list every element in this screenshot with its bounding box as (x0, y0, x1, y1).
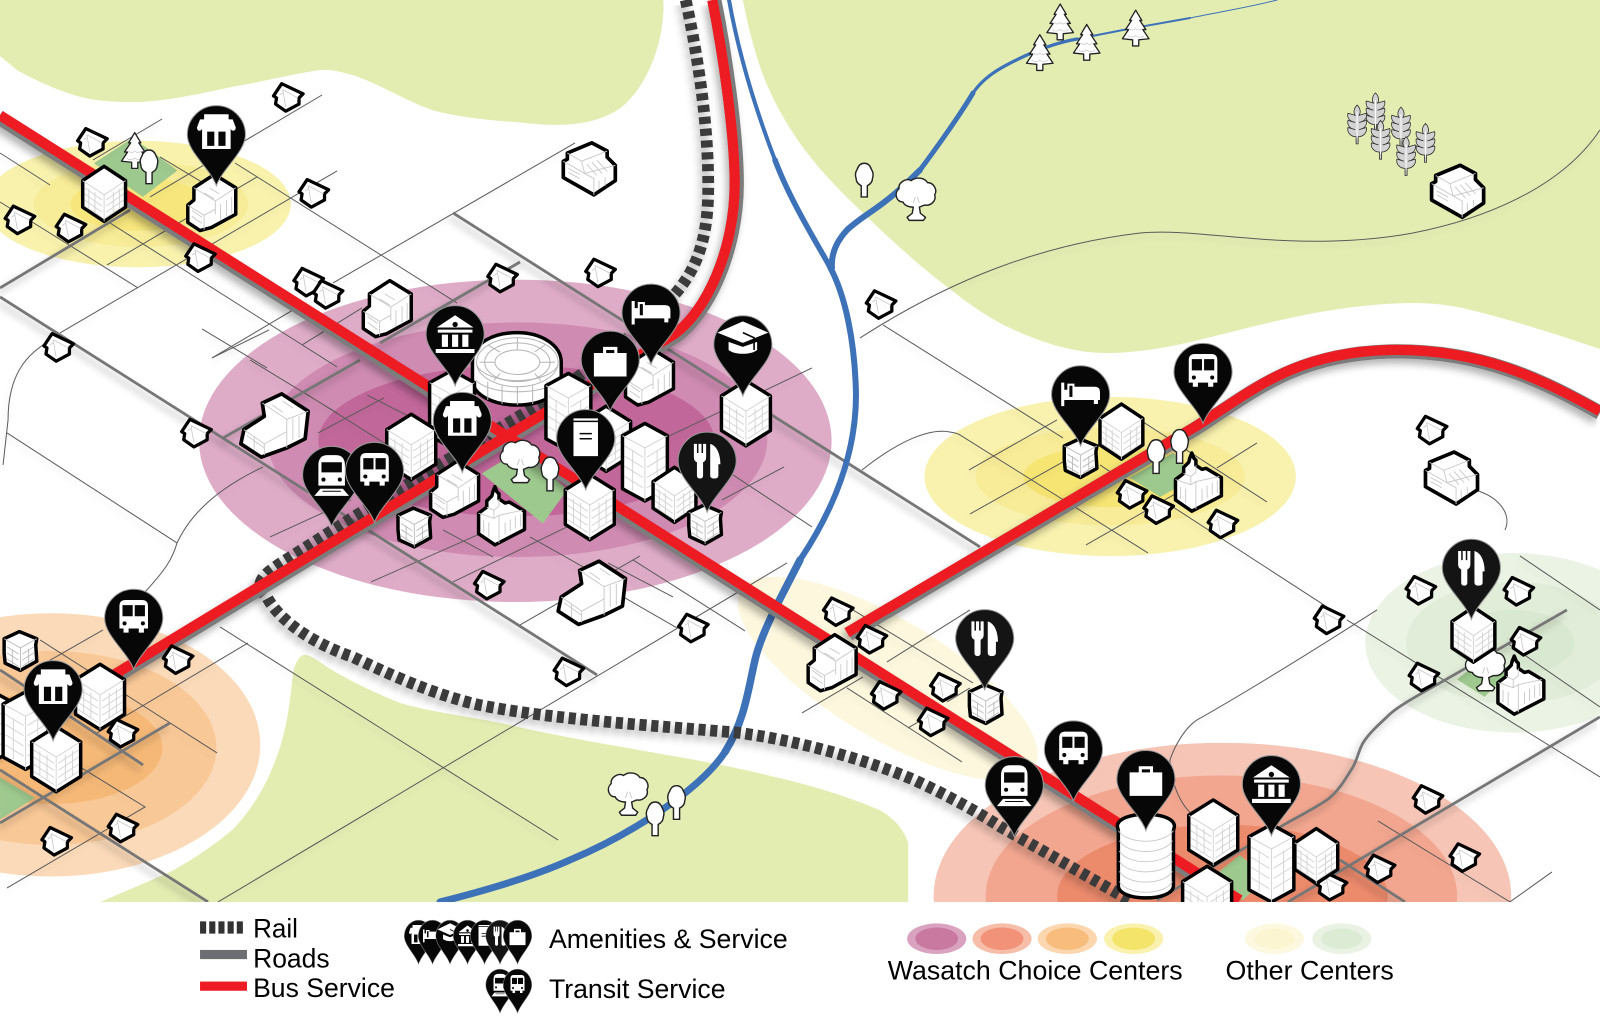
pin: employment (581, 331, 639, 411)
pin: restaurant middle (956, 610, 1014, 690)
thin local roads (0, 95, 1600, 902)
legend: transit pins (486, 969, 532, 1013)
pin: train center (303, 446, 361, 526)
center: yellow top left (0, 141, 291, 267)
stadium (472, 333, 561, 405)
pin: education (714, 316, 772, 396)
legend: other swatches (1245, 923, 1371, 954)
river (440, 0, 1277, 902)
collector roads (0, 210, 1600, 902)
houses (5, 84, 1541, 900)
pin: library (557, 410, 615, 490)
center: yellow right (924, 397, 1296, 556)
center: pale yellow (738, 576, 1038, 780)
legend: amenities label: Amenities & Service (549, 924, 788, 954)
buildings: purple center cluster (387, 349, 770, 547)
pin: restaurant far right (1442, 539, 1500, 619)
legend: roads: Roads (253, 943, 330, 973)
legend: rail (200, 914, 298, 944)
pin: bus bottom (1044, 721, 1103, 801)
legend (200, 914, 1394, 1013)
buildings: right and lower clusters (0, 439, 1544, 932)
center: pale green right (1365, 553, 1600, 733)
pin: employment bottom (1117, 750, 1175, 831)
pin: bed right (1052, 366, 1110, 446)
pin: bus left (105, 589, 163, 669)
legend: amenities pins (404, 920, 532, 964)
trees (121, 4, 1505, 836)
pin: bus center (345, 442, 404, 522)
legend: bus service: Bus Service (253, 973, 395, 1003)
center: purple Wasatch Choice (199, 280, 832, 602)
pin: civic bottom (1242, 756, 1300, 836)
pin: restaurant center (678, 432, 736, 512)
legend: transit label: Transit Service (549, 974, 726, 1004)
green area top left (0, 0, 663, 125)
legend: other label: Other Centers (1225, 956, 1394, 986)
pin: train bottom (985, 757, 1043, 837)
rail line (260, 0, 1133, 902)
river: main channel (440, 0, 856, 902)
pins: amenities and transit (24, 106, 1500, 837)
center: red bottom (934, 742, 1512, 902)
green area bottom center (100, 655, 908, 902)
pin: civic center (426, 306, 484, 386)
parks (0, 138, 1510, 900)
legend: roads (200, 943, 330, 973)
center: orange left (0, 613, 260, 876)
pin: shop top left (187, 106, 245, 186)
green area top right (743, 0, 1600, 353)
pin: shop center (433, 392, 491, 472)
pin: shop left (24, 661, 82, 741)
legend: wasatch swatches (907, 923, 1163, 954)
river: tributary (832, 0, 1277, 268)
pin: bus right (1174, 343, 1232, 423)
pin: bed (622, 284, 680, 364)
legend: rail: Rail (253, 914, 298, 944)
legend: wasatch label: Wasatch Choice Centers (888, 956, 1183, 986)
buildings: top left and outskirts (83, 143, 1484, 691)
